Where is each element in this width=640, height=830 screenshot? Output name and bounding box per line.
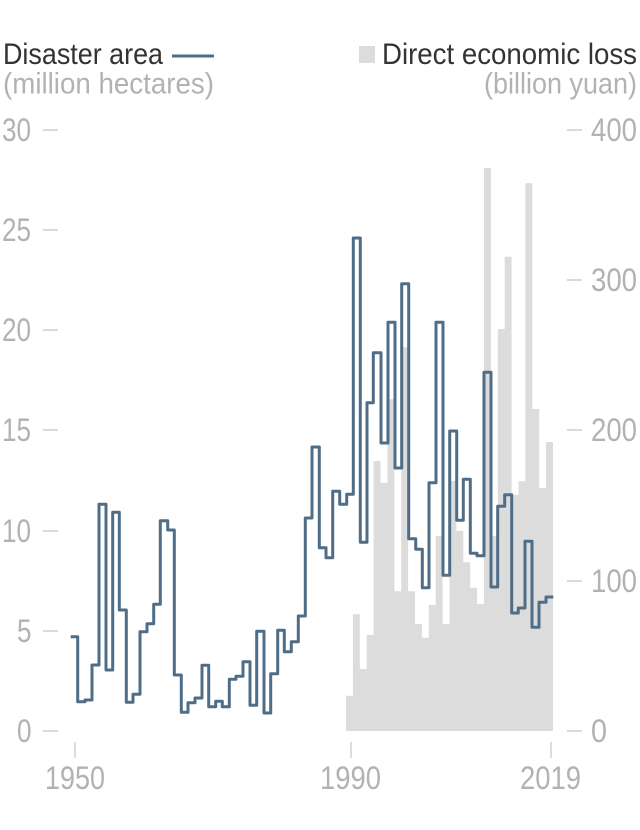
left axis: disaster area scale: 0 bbox=[17, 713, 32, 749]
legend: disaster area: Disaster area bbox=[3, 38, 163, 71]
legend: disaster area bbox=[3, 38, 214, 100]
x axis: years: 1950 bbox=[45, 760, 105, 796]
left axis: disaster area scale: 25 bbox=[2, 212, 31, 248]
legend: disaster area: (million hectares) bbox=[3, 68, 214, 100]
left axis: disaster area scale: 20 bbox=[2, 312, 31, 348]
right axis: economic loss scale: 0 bbox=[591, 713, 607, 749]
line: disaster area by year bbox=[71, 238, 553, 713]
x axis: years bbox=[45, 742, 581, 796]
x axis: years: 2019 bbox=[520, 760, 581, 796]
left axis: disaster area scale: 15 bbox=[2, 412, 31, 448]
right axis: economic loss scale bbox=[567, 112, 637, 749]
bars: direct economic loss by year bbox=[346, 168, 553, 731]
x axis: years: 1990 bbox=[320, 760, 381, 796]
left axis: disaster area scale: 10 bbox=[2, 513, 31, 549]
legend: direct economic loss bbox=[359, 38, 637, 100]
left axis: disaster area scale bbox=[2, 112, 58, 749]
left axis: disaster area scale: 30 bbox=[2, 112, 31, 148]
left axis: disaster area scale: 5 bbox=[17, 613, 32, 649]
